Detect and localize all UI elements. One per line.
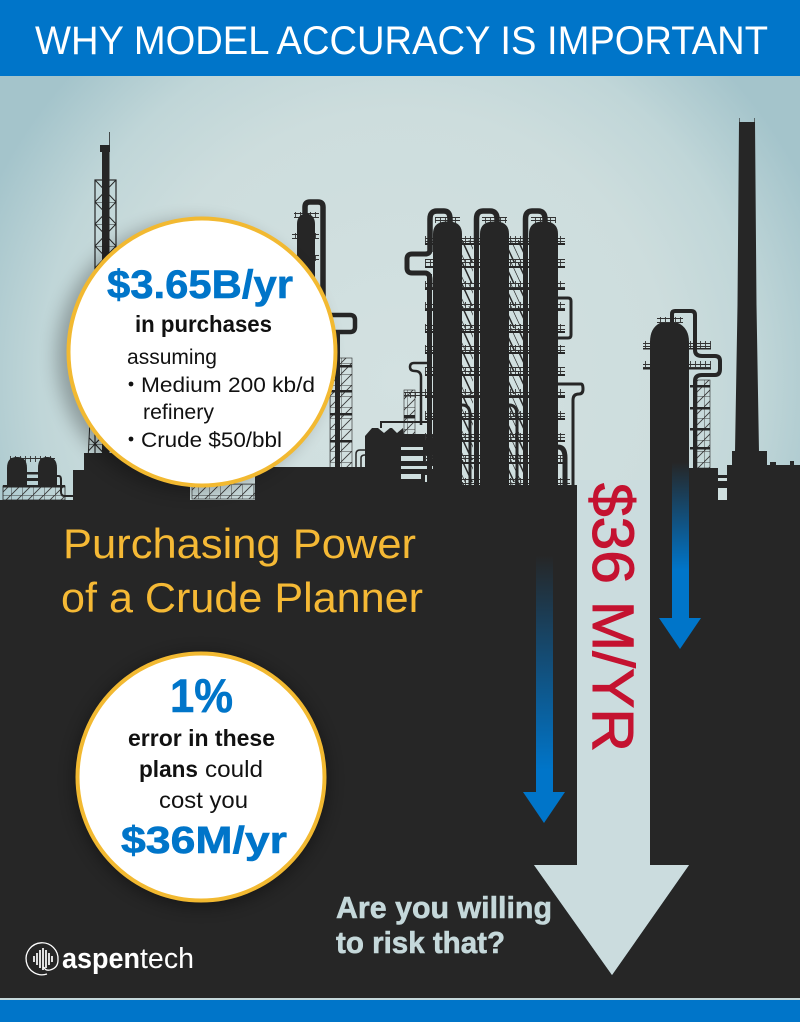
small tanks and equipment [356, 363, 433, 486]
circle callout: error cost [76, 654, 326, 905]
chimney stack [727, 118, 800, 475]
title banner: WHY MODEL ACCURACY IS IMPORTANT [35, 19, 768, 63]
blue arrow left [523, 555, 565, 823]
question text [336, 890, 552, 960]
blue arrow right [659, 462, 701, 649]
heading: purchasing power: of a Crude Planner [61, 574, 423, 621]
left column with pipes [292, 202, 355, 470]
heading: purchasing power [61, 520, 423, 621]
circle callout: purchases: in purchases [135, 311, 272, 337]
ground silhouette [0, 453, 800, 1000]
question text: to risk that? [336, 925, 505, 960]
big downward arrow [534, 480, 689, 975]
circle callout: purchases: refinery [143, 401, 214, 424]
aspentech logo: aspen [62, 943, 140, 975]
aspentech logo: tech [140, 943, 194, 975]
title banner [0, 0, 800, 76]
circle callout: purchases: $3.65B/yr [107, 263, 293, 307]
triple distillation columns [407, 211, 583, 486]
circle callout: error cost: could [205, 756, 263, 782]
circle callout: error cost: cost you [159, 787, 248, 813]
circle callout: purchases: Medium 200 kb/d [141, 374, 315, 397]
circle callout: error cost: $36M/yr [121, 820, 287, 862]
circle callout: purchases: assuming [127, 346, 217, 369]
heading: purchasing power: Purchasing Power [63, 520, 416, 567]
left tanks [3, 456, 75, 500]
under-circle lattice [192, 484, 255, 499]
circle callout: error cost: error in these [128, 725, 275, 751]
circle callout: purchases [57, 218, 336, 491]
circle callout: error cost: 1% [170, 669, 233, 722]
circle callout: purchases: Crude $50/bbl [141, 429, 282, 452]
fourth column and platforms [643, 311, 720, 470]
rotated red label: $36 M/YR [580, 483, 645, 752]
aspentech logo [26, 943, 194, 975]
question text: Are you willing [336, 890, 552, 925]
circle callout: error cost: plans [139, 756, 198, 782]
footer bar [0, 998, 800, 1022]
flare tower [88, 132, 116, 470]
